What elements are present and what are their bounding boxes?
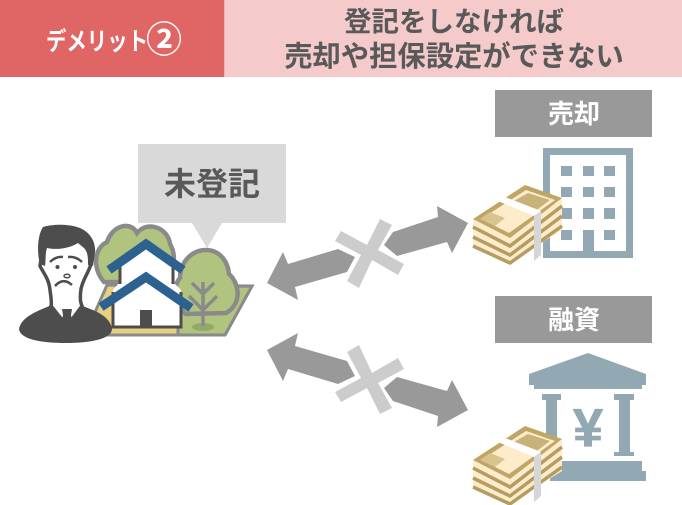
arrow: from financing xyxy=(267,333,355,384)
illustration: house on lot xyxy=(19,225,252,343)
header: title xyxy=(225,0,682,77)
title line 2: 売却や担保設定ができない xyxy=(284,40,624,72)
speech bubble: unregistered xyxy=(138,144,286,248)
arrow: to sale xyxy=(384,206,468,256)
brows xyxy=(50,257,82,262)
eyes xyxy=(56,265,60,269)
neck and face xyxy=(40,240,91,326)
speech bubble: unregistered: 未登記 xyxy=(164,166,260,202)
icon: cash bundle top xyxy=(473,185,562,263)
icon: bank xyxy=(529,353,646,481)
arrow group: top xyxy=(267,206,468,300)
badge number: ② xyxy=(146,19,182,60)
icon: office building xyxy=(546,152,630,257)
nose xyxy=(64,274,70,278)
badge text: デメリット xyxy=(46,27,148,56)
hair xyxy=(38,225,95,266)
arrow: to financing xyxy=(384,377,468,427)
arrow: from sale xyxy=(267,249,355,300)
label: sale: 売却 xyxy=(548,99,600,129)
tie xyxy=(61,309,73,331)
tree right xyxy=(175,250,238,331)
icon: cash bundle bottom xyxy=(473,426,562,504)
header: badge xyxy=(0,0,224,77)
title line 1: 登記をしなければ xyxy=(344,6,564,37)
label: financing xyxy=(495,296,652,343)
ground plot xyxy=(85,285,252,335)
label: financing: 融資 xyxy=(548,305,600,335)
arrow group: bottom xyxy=(267,333,468,427)
tree left xyxy=(96,226,174,282)
suit xyxy=(19,305,112,343)
cross mark xyxy=(335,345,404,414)
mouth xyxy=(55,281,72,286)
house xyxy=(101,244,191,327)
person xyxy=(19,225,112,343)
cross mark xyxy=(335,219,404,288)
label: sale xyxy=(495,90,652,137)
icon: bank: ¥ xyxy=(573,398,603,458)
